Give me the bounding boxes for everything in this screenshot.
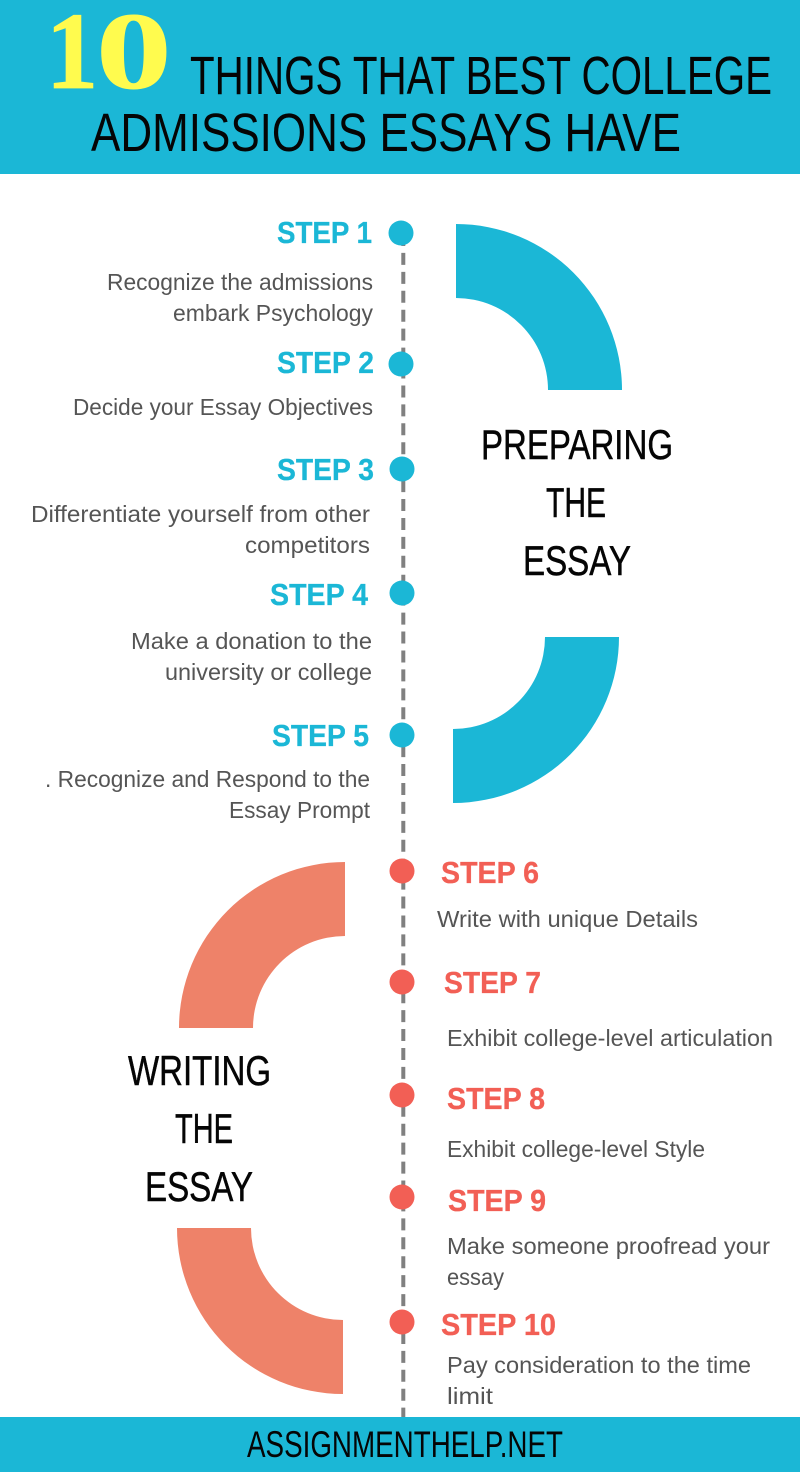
step 2 <box>73 345 414 420</box>
step 5: STEP 5 <box>272 718 369 753</box>
heading: writing the essay <box>128 1047 271 1210</box>
heading: writing the essay: ESSAY <box>145 1163 253 1210</box>
heading: preparing the essay: THE <box>546 479 606 526</box>
step 3: competitors <box>245 532 370 558</box>
footer banner <box>0 1417 800 1472</box>
step 10: Pay consideration to the time <box>447 1352 751 1378</box>
step 4: university or college <box>165 659 372 685</box>
header banner <box>0 0 800 174</box>
step 7 <box>390 965 773 1051</box>
panel: preparing the essay <box>453 224 673 803</box>
step 1 <box>107 215 414 326</box>
step 1: STEP 1 <box>277 215 372 250</box>
step 10: limit <box>447 1383 494 1409</box>
step 1: Recognize the admissions <box>107 269 373 295</box>
step 8: Exhibit college-level Style <box>447 1136 705 1162</box>
step 9: STEP 9 <box>448 1183 546 1218</box>
step 5 <box>45 718 414 823</box>
arc: bottom teal <box>453 637 619 803</box>
step 7: Exhibit college-level articulation <box>447 1025 773 1051</box>
heading: writing the essay: WRITING <box>128 1047 271 1094</box>
step 6 <box>390 855 698 932</box>
footer website text: ASSIGNMENTHELP.NET <box>247 1424 563 1465</box>
step 9 <box>390 1183 770 1290</box>
step 5: Essay Prompt <box>229 797 370 823</box>
arc: bottom coral <box>177 1228 343 1394</box>
step 8 <box>390 1081 705 1162</box>
step 3 <box>31 452 414 558</box>
arc: top teal <box>456 224 622 390</box>
heading: preparing the essay: ESSAY <box>523 537 631 584</box>
step 5: . Recognize and Respond to the <box>45 766 370 792</box>
step 7: STEP 7 <box>444 965 541 1000</box>
heading: preparing the essay: PREPARING <box>481 421 673 468</box>
step 8: STEP 8 <box>447 1081 545 1116</box>
step 6: Write with unique Details <box>437 906 698 932</box>
step 4 <box>131 577 414 685</box>
step 3: Differentiate yourself from other <box>31 501 370 527</box>
step 2: Decide your Essay Objectives <box>73 394 373 420</box>
heading: preparing the essay <box>481 421 673 584</box>
step 9: Make someone proofread your <box>447 1233 770 1259</box>
big number 10 <box>46 0 172 113</box>
step 2: STEP 2 <box>277 345 374 380</box>
step 4: STEP 4 <box>270 577 369 612</box>
step 10 <box>390 1307 751 1409</box>
step 3: STEP 3 <box>277 452 374 487</box>
step 1: embark Psychology <box>173 300 373 326</box>
step 10: STEP 10 <box>441 1307 556 1342</box>
arc: top coral <box>179 862 345 1028</box>
title line 2: ADMISSIONS ESSAYS HAVE <box>91 103 681 163</box>
step 9: essay <box>447 1264 504 1290</box>
timeline dashed line <box>401 234 405 1417</box>
step 6: STEP 6 <box>441 855 539 890</box>
panel: writing the essay <box>128 862 345 1394</box>
step 4: Make a donation to the <box>131 628 372 654</box>
heading: writing the essay: THE <box>175 1105 233 1152</box>
